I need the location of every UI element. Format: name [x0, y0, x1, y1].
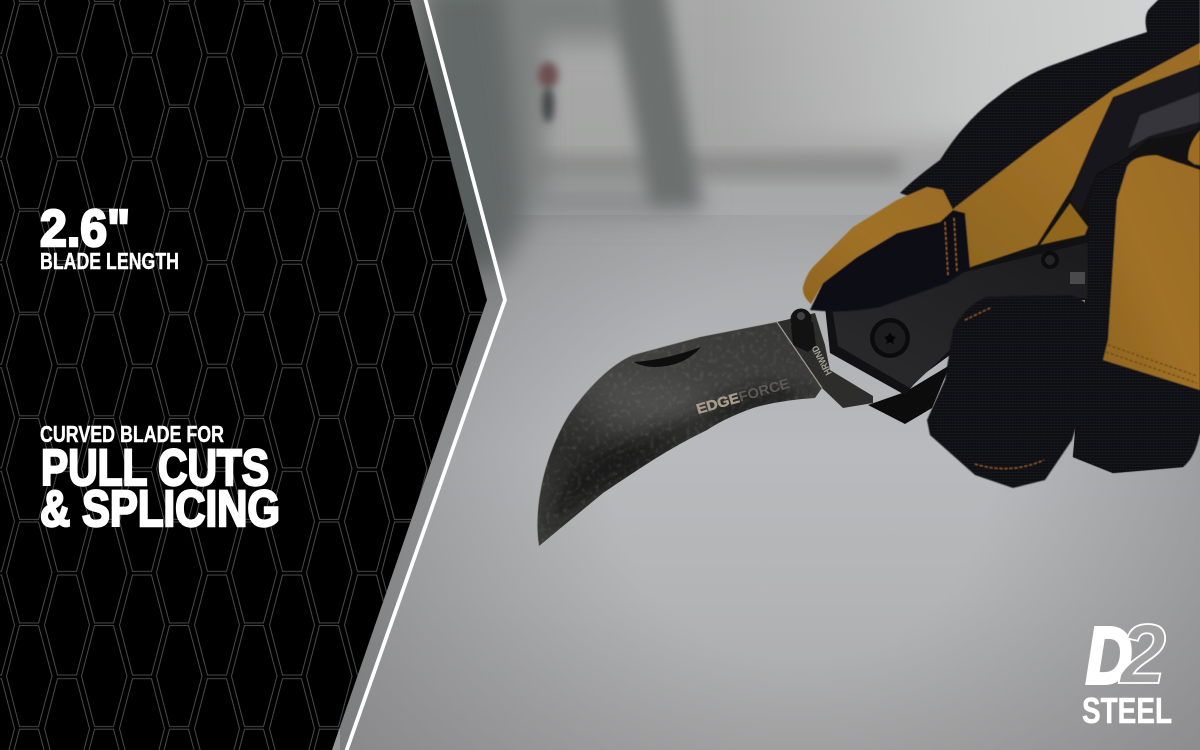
panel: hex pattern black side panel	[0, 0, 487, 750]
blade logo	[694, 375, 791, 417]
blade finger slot	[634, 347, 701, 367]
blade logo: FORCE	[737, 375, 791, 405]
thumb leather	[810, 210, 970, 311]
glove back (black knit)	[900, 0, 1200, 240]
callout: curved blade: & SPLICING	[40, 480, 280, 537]
stat: blade length: 2.6"	[40, 200, 130, 258]
glove palm leather (tan)	[953, 43, 1200, 268]
glove dark stripe	[1070, 66, 1200, 213]
callout: curved blade: PULL CUTS	[41, 439, 269, 496]
blade	[530, 315, 830, 550]
badge: D2 steel: STEEL	[1082, 690, 1172, 731]
callout: curved blade: CURVED BLADE FOR	[40, 421, 224, 447]
callout: curved blade	[40, 421, 280, 537]
knife handle	[825, 238, 1095, 424]
stat: blade length	[40, 200, 179, 274]
chevron line	[346, 0, 505, 750]
knife	[530, 0, 1200, 550]
front finger	[927, 295, 1096, 488]
big finger	[1073, 157, 1200, 473]
knife tang and pivot: HRWND	[810, 343, 835, 377]
stat: blade length: BLADE LENGTH	[40, 248, 179, 274]
badge: D2 steel	[1082, 607, 1172, 731]
glove	[803, 0, 1200, 488]
thumb tip	[803, 187, 953, 304]
knife tang and pivot	[777, 308, 873, 408]
hand shadow base	[960, 60, 1200, 473]
divider band	[332, 0, 507, 750]
badge: D2 steel: D	[1086, 611, 1132, 700]
blade logo: EDGE	[694, 389, 741, 417]
badge: D2 steel: 2	[1118, 607, 1166, 701]
